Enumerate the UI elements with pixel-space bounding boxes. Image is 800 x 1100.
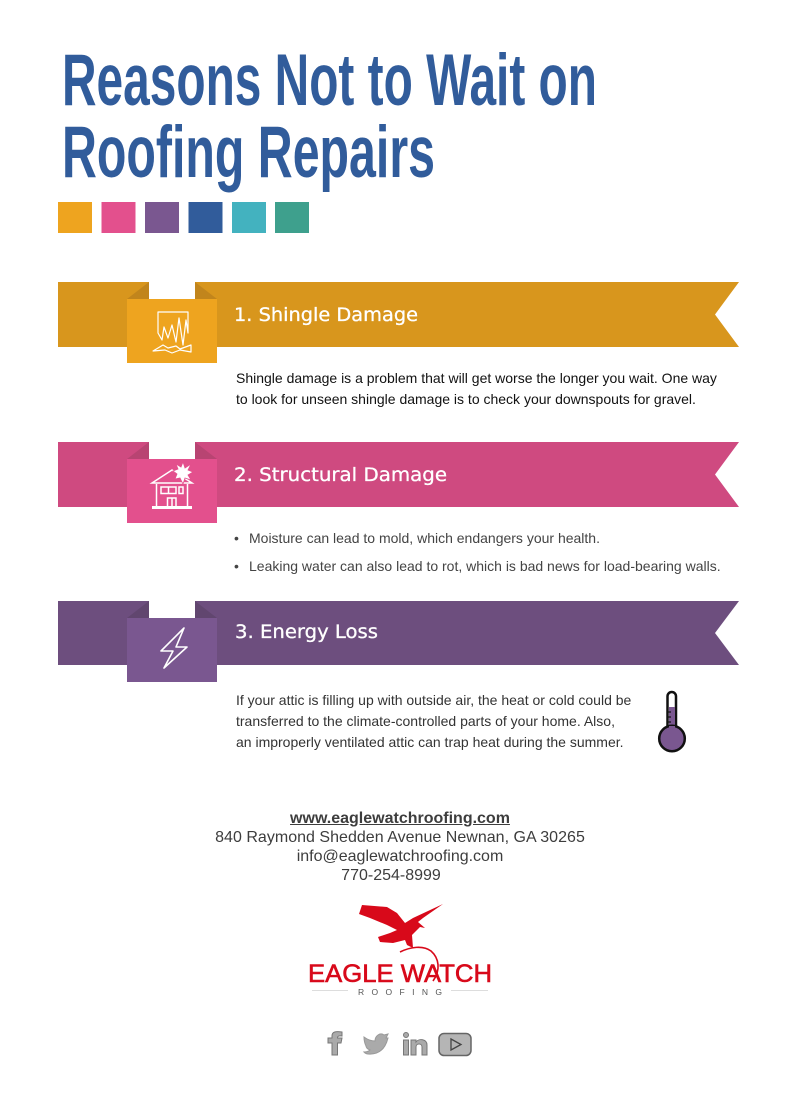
- icon tile: energy loss: [127, 618, 217, 682]
- phone: 770-254-8999: [341, 867, 441, 884]
- icon: facebook: [328, 1032, 342, 1055]
- address: 840 Raymond Shedden Avenue Newnan, GA 30265: [215, 829, 585, 846]
- ribbon fold: right: [195, 442, 217, 459]
- text: shingle damage description: [236, 370, 717, 407]
- bullet list: structural damage: [234, 530, 721, 574]
- icon: lightning bolt: [161, 628, 187, 668]
- icon: damaged shingle: [153, 312, 191, 353]
- logo tagline: ROOFING: [358, 987, 442, 997]
- title: Roofing Repairs: [62, 112, 435, 193]
- logo wordmark: EAGLE WATCH: [308, 960, 492, 988]
- icon: twitter: [364, 1034, 388, 1054]
- ribbon fold: left: [127, 442, 149, 459]
- text: energy loss description: transferred to the climate-controlled parts of your home. Also,: [236, 713, 615, 729]
- website link: www.eaglewatchroofing.com: [290, 810, 510, 827]
- icon: thermometer: [658, 690, 686, 752]
- text: energy loss description: an improperly ventilated attic can trap heat during the summer.: [236, 734, 624, 750]
- ribbon fold: left: [127, 601, 149, 618]
- bullet: rot: Leaking water can also lead to rot, which is bad news for load-bearing walls.: [249, 558, 721, 574]
- footer contact details: [215, 810, 585, 884]
- ribbon: energy loss: [58, 601, 739, 665]
- bullet: mold: •: [234, 530, 239, 546]
- heading: energy loss: 3. Energy Loss: [235, 621, 378, 643]
- icon: youtube: [439, 1034, 471, 1056]
- icon tile: shingle damage: [127, 299, 217, 363]
- text: shingle damage description: Shingle damage is a problem that will get worse the longer you wait. One way: [236, 370, 717, 386]
- ribbon: shingle damage: [58, 282, 739, 347]
- ribbon fold: right: [195, 601, 217, 618]
- panel: energy loss banner: [58, 601, 739, 682]
- logo eagle: [359, 904, 443, 981]
- text: energy loss description: If your attic is filling up with outside air, the heat or cold could be: [236, 692, 631, 708]
- ribbon: structural damage: [58, 442, 739, 507]
- heading: shingle damage: 1. Shingle Damage: [234, 304, 418, 326]
- email: info@eaglewatchroofing.com: [297, 848, 503, 865]
- panel: shingle damage banner: [58, 282, 739, 363]
- icon: damaged house: [152, 462, 193, 509]
- ribbon fold: left: [127, 282, 149, 299]
- panel: structural damage banner: [58, 442, 739, 523]
- bullet: mold: Moisture can lead to mold, which endangers your health.: [249, 530, 600, 546]
- text: energy loss description: [236, 692, 631, 750]
- bullet: rot: •: [234, 558, 239, 574]
- icon tile: structural damage: [127, 459, 217, 523]
- heading: structural damage: 2. Structural Damage: [234, 464, 447, 486]
- text: shingle damage description: to look for unseen shingle damage is to check your downspouts for gravel.: [236, 391, 696, 407]
- colour swatches: [58, 202, 309, 233]
- title: [62, 40, 597, 193]
- ribbon fold: right: [195, 282, 217, 299]
- icon: linkedin: [404, 1032, 427, 1055]
